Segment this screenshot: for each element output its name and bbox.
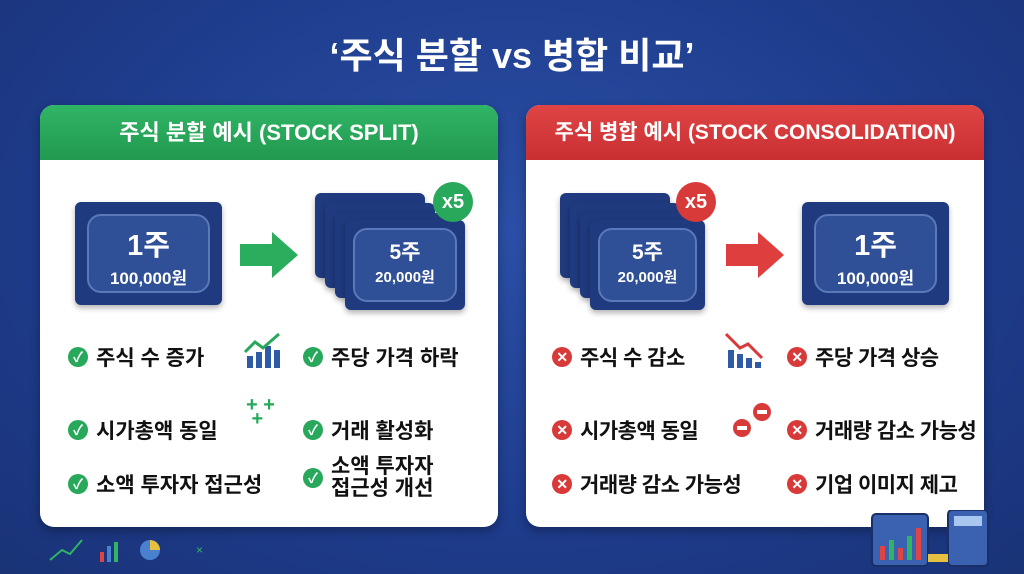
card: 1 share: 100,000원 xyxy=(110,269,187,288)
panel: stock split xyxy=(40,105,498,527)
card stack: 5 shares: 5주 xyxy=(632,241,663,264)
badge: x5: x5 xyxy=(685,191,707,213)
list: consolidation effects: 시가총액 동일 xyxy=(580,420,698,443)
list: consolidation effects: 주식 수 감소 xyxy=(580,347,685,370)
list: split effects: + + xyxy=(246,394,275,416)
list: consolidation effects: ✕ xyxy=(791,349,803,365)
list: split effects: ✓ xyxy=(73,349,83,365)
list: split effects: + xyxy=(252,408,263,430)
list: split effects: 거래 활성화 xyxy=(331,420,433,443)
card stack: 5 shares: 20,000원 xyxy=(618,269,677,286)
list: consolidation effects: ✕ xyxy=(556,349,568,365)
icons: bottom-left decoration: × xyxy=(196,543,203,557)
list: split effects: ✓ xyxy=(308,349,318,365)
list: split effects: 시가총액 동일 xyxy=(96,420,218,443)
list: split effects xyxy=(68,333,459,500)
card stack: 5 shares xyxy=(312,192,468,316)
list: consolidation effects: ✕ xyxy=(791,476,803,492)
card: 1 share: 1주 xyxy=(127,230,170,262)
list: split effects: ✓ xyxy=(73,476,83,492)
header: consolidation xyxy=(526,105,984,160)
badge: x5 xyxy=(676,182,716,222)
header: split xyxy=(40,105,498,160)
list: consolidation effects: 거래량 감소 가능성 xyxy=(815,420,976,443)
list: split effects: ✓ xyxy=(73,422,83,438)
list: consolidation effects xyxy=(552,333,976,497)
list: split effects: 주당 가격 하락 xyxy=(331,347,459,370)
list: split effects: 소액 투자자 xyxy=(331,455,433,478)
icon: chart window and calculator xyxy=(871,510,989,567)
list: split effects: ✓ xyxy=(308,422,318,438)
title: ‘주식 분할 vs 병합 비교’ xyxy=(329,35,694,76)
card stack: 5 shares: 20,000원 xyxy=(375,269,435,286)
badge: x5 xyxy=(433,182,473,222)
header: consolidation: 주식 병합 예시 (STOCK CONSOLIDATION) xyxy=(555,121,955,144)
list: split effects: 주식 수 증가 xyxy=(96,347,204,370)
list: consolidation effects: ✕ xyxy=(791,422,803,438)
card stack: 5 shares xyxy=(556,192,708,316)
card stack: 5 shares: 5주 xyxy=(390,241,420,264)
list: consolidation effects: 거래량 감소 가능성 xyxy=(580,474,741,497)
card: 1 share: 1주 xyxy=(854,230,897,262)
panel: stock consolidation xyxy=(526,105,984,527)
arrow: green xyxy=(240,232,298,278)
list: split effects: 소액 투자자 접근성 xyxy=(96,474,262,497)
list: consolidation effects: 기업 이미지 제고 xyxy=(815,474,957,497)
card: 1 share xyxy=(75,202,222,305)
list: split effects: ✓ xyxy=(308,470,318,486)
list: consolidation effects: ✕ xyxy=(556,476,568,492)
list: consolidation effects: ✕ xyxy=(556,422,568,438)
icons: bottom-left decoration xyxy=(49,540,203,562)
list: split effects: 접근성 개선 xyxy=(331,477,433,500)
card: 1 share xyxy=(802,202,949,305)
arrow: red xyxy=(726,232,784,278)
card: 1 share: 100,000원 xyxy=(837,269,914,288)
list: consolidation effects: 주당 가격 상승 xyxy=(815,347,939,370)
badge: x5: x5 xyxy=(442,191,464,213)
header: split: 주식 분할 예시 (STOCK SPLIT) xyxy=(119,120,419,145)
